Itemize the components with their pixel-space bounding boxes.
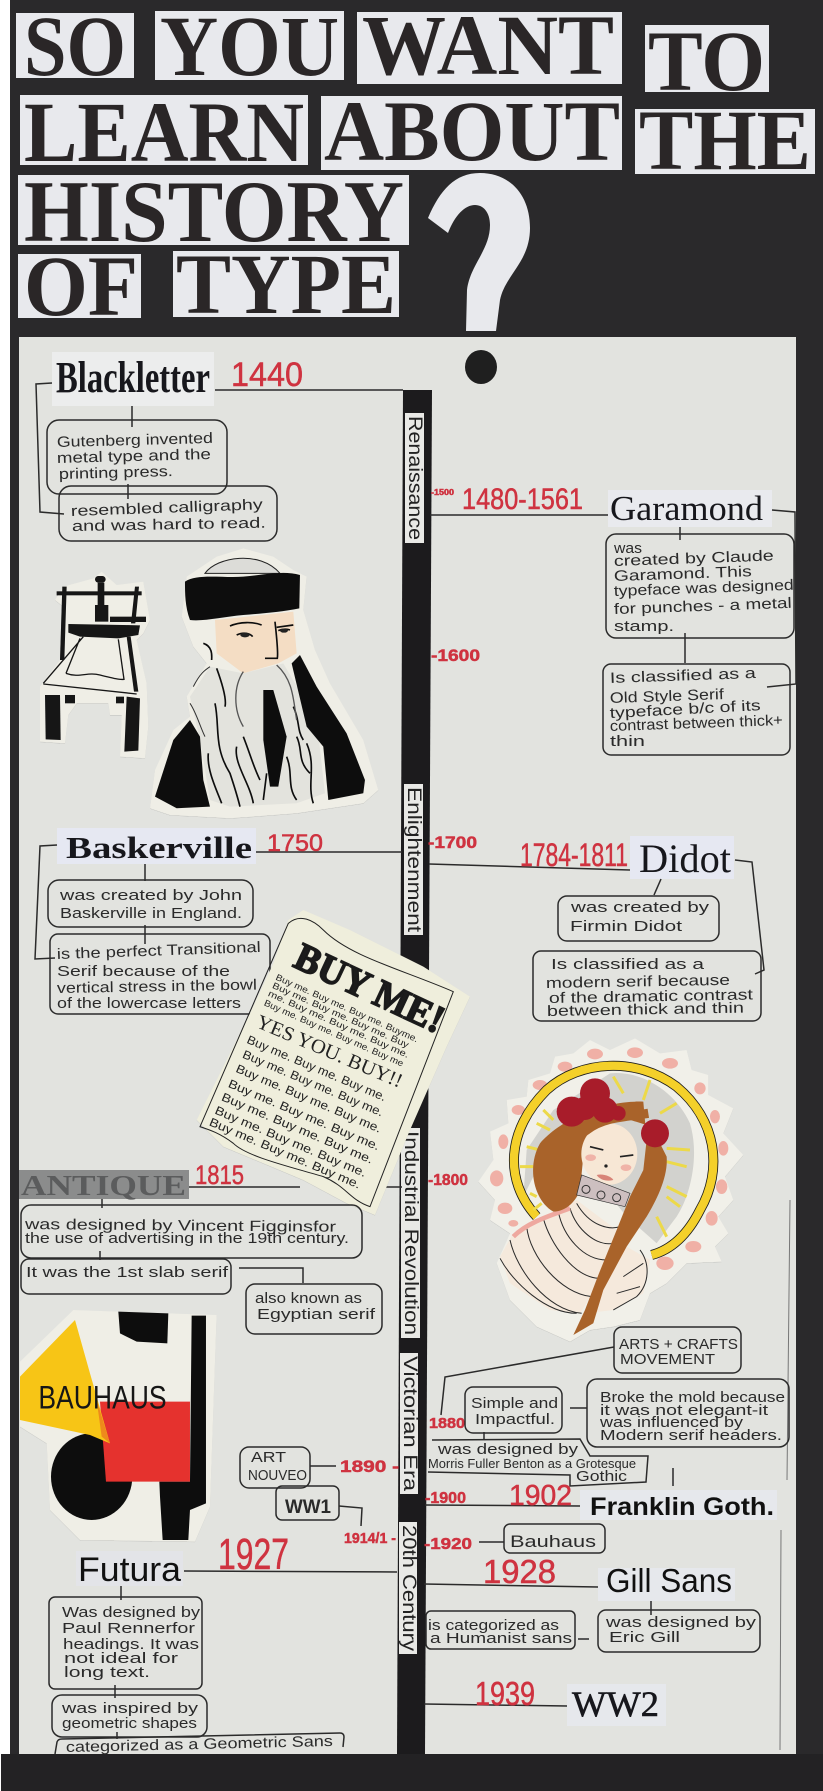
- Gill Sans section: 1928: [483, 1553, 556, 1590]
- timeline tick labels: -1700: [428, 833, 477, 852]
- Garamond section: for punches - a metal: [614, 595, 792, 618]
- Franklin Gothic section: Broke the mold because: [600, 1389, 785, 1406]
- Garamond section: Old Style Serif: [610, 686, 725, 707]
- Franklin Gothic section: was influenced by: [599, 1414, 744, 1431]
- Futura section: 1927: [218, 1530, 289, 1579]
- Didot section: of the dramatic contrast: [549, 986, 754, 1007]
- Garamond section: Is classified as a: [610, 665, 757, 687]
- WW2 section: 1939: [475, 1675, 535, 1712]
- Arts and Crafts callout: ARTS + CRAFTS: [619, 1336, 738, 1353]
- Baskerville section: vertical stress in the bowl: [57, 977, 257, 997]
- Garamond section: typeface was designed: [614, 577, 794, 600]
- era labels: Renaissance: [404, 416, 425, 540]
- timeline tick labels: -1600: [431, 646, 480, 665]
- title: LEARN: [24, 84, 304, 180]
- Blackletter section: [36, 352, 303, 541]
- Blackletter section: printing press.: [59, 463, 173, 483]
- timeline tick labels: 1880: [429, 1415, 465, 1432]
- Bauhaus callout: [479, 1524, 605, 1553]
- Blackletter section: resembled calligraphy: [71, 496, 264, 520]
- Baskerville section: Baskerville in England.: [60, 905, 242, 922]
- Didot section: was created by: [570, 899, 710, 916]
- Blackletter section: Gutenberg invented: [57, 430, 213, 451]
- Franklin Gothic section: Impactful.: [475, 1411, 555, 1428]
- Antique section: the use of advertising in the 19th century.: [25, 1230, 349, 1247]
- Art Nouveau callout: ART: [251, 1449, 286, 1466]
- Didot section: Firmin Didot: [570, 918, 683, 935]
- timeline tick labels: 1914/1 -: [344, 1530, 396, 1547]
- WW2 section: [475, 1675, 666, 1726]
- icon: Buy Me poster: [197, 910, 470, 1215]
- title: YOU: [160, 0, 339, 94]
- Franklin Gothic section: was designed by: [437, 1441, 579, 1458]
- icon: Buy Me poster: Buy me. Buy me. Buy me.: [207, 1115, 363, 1192]
- era labels: Industrial Revolution: [400, 1131, 421, 1335]
- icon: Bauhaus poster: [20, 1310, 217, 1542]
- Didot section: 1784-1811: [520, 837, 628, 873]
- WW1 callout: [276, 1486, 362, 1526]
- Baskerville section: 1750: [267, 830, 323, 857]
- era labels: Victorian Era: [399, 1356, 420, 1492]
- icon: Buy Me poster: Buy me. Buy me. Buy me. Buy me: [263, 998, 405, 1068]
- Baskerville section: Serif because of the: [57, 963, 230, 980]
- Garamond section: 1480-1561: [462, 483, 583, 516]
- icon: Buy Me poster: me. Buy me. Buy me. Buy me.: [267, 988, 411, 1060]
- Art Nouveau callout: [240, 1447, 336, 1488]
- icon: printing press: [40, 572, 150, 758]
- Garamond section: stamp.: [614, 618, 674, 635]
- Franklin Gothic section: 1902: [509, 1480, 572, 1512]
- Baskerville section: [35, 828, 323, 1014]
- Baskerville section: is the perfect Transitional: [57, 939, 261, 963]
- Blackletter section: 1440: [231, 356, 303, 394]
- Bauhaus callout: Bauhaus: [510, 1532, 596, 1551]
- Futura section: geometric shapes: [62, 1715, 197, 1732]
- Didot section: modern serif because: [546, 972, 730, 992]
- WW1 callout: WW1: [285, 1497, 331, 1518]
- icon: Buy Me poster: Buy me. Buy me. Buy me. Buyme.: [274, 972, 420, 1044]
- Garamond section: was: [613, 540, 642, 557]
- title: HISTORY: [24, 164, 404, 261]
- timeline tick labels: -1500: [431, 488, 455, 497]
- Art Nouveau callout: NOUVEO: [248, 1467, 307, 1484]
- Futura section: Was designed by: [62, 1604, 201, 1621]
- icon: Buy Me poster: Buy me. Buy me. Buy me. Buy: [271, 980, 411, 1050]
- icon: Art Nouveau portrait: [478, 1038, 743, 1342]
- timeline tick labels: -1800: [428, 1172, 468, 1189]
- Blackletter section: and was hard to read.: [72, 515, 266, 535]
- paper background panel: [19, 337, 796, 1754]
- timeline tick labels: -1920: [424, 1536, 472, 1553]
- Franklin Gothic section: it was not elegant-it: [600, 1402, 769, 1419]
- Franklin Gothic section: Simple and: [471, 1395, 558, 1412]
- Futura section: Paul Rennerfor: [62, 1620, 195, 1637]
- Didot section: Is classified as a: [551, 956, 705, 973]
- icon: Buy Me poster: Buy me. Buy me. Buy me.: [234, 1062, 383, 1136]
- Gill Sans section: Eric Gill: [609, 1629, 680, 1646]
- Antique section: also known as: [255, 1290, 362, 1307]
- Antique section: It was the 1st slab serif: [26, 1264, 229, 1281]
- icon: Buy Me poster: Buy me. Buy me. Buy me.: [219, 1090, 375, 1167]
- era labels: [398, 413, 425, 1654]
- icon: Buy Me poster: Buy me. Buy me. Buy me.: [213, 1103, 369, 1180]
- Antique section: was designed by Vincent Figginsfor: [24, 1216, 336, 1236]
- title: SO: [24, 0, 126, 94]
- Gill Sans section: [426, 1553, 760, 1652]
- Gill Sans section: a Humanist sans: [430, 1630, 572, 1647]
- timeline bar: [397, 390, 432, 1754]
- title: OF: [24, 238, 138, 334]
- icon: Buy Me poster: Buy me. Buy me. Buy me.: [226, 1077, 382, 1153]
- title: ABOUT: [324, 83, 620, 179]
- icon: Bauhaus poster: BAUHAUS: [38, 1379, 167, 1415]
- Garamond section: created by Claude: [614, 547, 774, 570]
- Garamond section: Garamond: [610, 489, 764, 528]
- Blackletter section: metal type and the: [57, 446, 211, 467]
- Antique section: [19, 1160, 382, 1334]
- Antique section: ANTIQUE: [21, 1170, 186, 1202]
- Gill Sans section: Gill Sans: [606, 1562, 732, 1599]
- question mark dot: [465, 350, 497, 384]
- Didot section: Didot: [639, 836, 731, 881]
- timeline tick labels: -1900: [425, 1490, 466, 1507]
- icon: Buy Me poster: Buy me. Buy me. Buy me.: [245, 1033, 388, 1104]
- icon: Buy Me poster: Buy me. Buy me. Buy me.: [240, 1047, 386, 1119]
- timeline tick labels: [340, 488, 480, 1553]
- Gill Sans section: is categorized as: [428, 1617, 559, 1634]
- Garamond section: typeface b/c of its: [609, 697, 761, 722]
- connector lines: [184, 390, 790, 1750]
- Baskerville section: of the lowercase letters: [57, 995, 241, 1012]
- Baskerville section: was created by John: [59, 887, 242, 904]
- Franklin Gothic section: Morris Fuller Benton as a Grotesque: [428, 1456, 636, 1471]
- title: TYPE: [176, 236, 396, 332]
- Garamond section: Garamond. This: [614, 563, 752, 585]
- timeline tick labels: 1890 -: [340, 1457, 399, 1476]
- icon: Gutenberg portrait: [150, 548, 378, 818]
- Franklin Gothic section: [428, 1379, 789, 1521]
- Franklin Gothic section: Franklin Goth.: [590, 1493, 774, 1521]
- Franklin Gothic section: Gothic: [576, 1468, 628, 1485]
- WW2 section: WW2: [572, 1684, 659, 1724]
- Arts and Crafts callout: [441, 1327, 741, 1415]
- question mark: [428, 173, 530, 331]
- Blackletter section: Blackletter: [56, 353, 210, 402]
- Futura section: not ideal for: [64, 1650, 178, 1667]
- Futura section: [49, 1530, 344, 1756]
- Baskerville section: Baskerville: [66, 830, 252, 865]
- Futura section: Futura: [78, 1551, 181, 1589]
- era labels: Enlightenment: [403, 787, 424, 933]
- Garamond section: [462, 483, 796, 755]
- Futura section: categorized as a Geometric Sans: [66, 1733, 333, 1756]
- Didot section: [520, 836, 764, 1021]
- Antique section: Egyptian serif: [257, 1306, 376, 1323]
- title: THE: [639, 92, 811, 188]
- Futura section: was inspired by: [61, 1700, 199, 1717]
- Garamond section: thin: [610, 733, 645, 750]
- icon: Buy Me poster: BUY ME!: [288, 934, 451, 1042]
- Antique section: 1815: [195, 1160, 244, 1190]
- icon: Buy Me poster: YES YOU. BUY!!: [253, 1011, 406, 1092]
- title: TO: [648, 13, 765, 109]
- Futura section: long text.: [64, 1664, 150, 1681]
- title: [16, 0, 815, 334]
- Didot section: between thick and thin: [547, 1000, 744, 1020]
- Gill Sans section: was designed by: [605, 1614, 757, 1631]
- Arts and Crafts callout: MOVEMENT: [620, 1351, 715, 1368]
- Garamond section: contrast between thick+: [610, 712, 783, 735]
- Futura section: headings. It was: [63, 1636, 199, 1653]
- Franklin Gothic section: Modern serif headers.: [600, 1427, 782, 1444]
- era labels: 20th Century: [398, 1525, 419, 1652]
